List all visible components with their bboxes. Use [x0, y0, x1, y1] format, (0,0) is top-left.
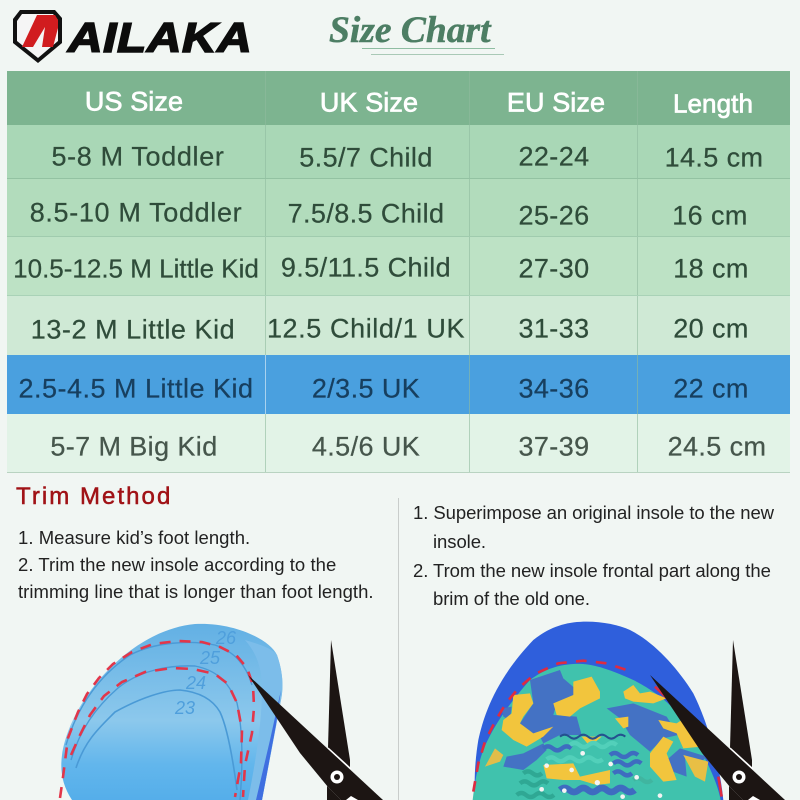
- row 1: [7, 125, 790, 179]
- size table: 20 cm: [673, 314, 749, 344]
- row 5 text: 2.5-4.5 M Little Kid: [18, 374, 254, 404]
- size table: 14.5 cm: [665, 142, 763, 172]
- size table: 2/3.5 UK: [312, 374, 420, 404]
- size table: Length: [673, 88, 753, 118]
- left instructions: 1. Measure kid’s foot length.: [18, 527, 250, 548]
- size table: 12.5 Child/1 UK: [267, 314, 465, 344]
- size table: 31-33: [518, 314, 590, 344]
- trim line: [473, 661, 632, 792]
- right instructions: insole.: [433, 531, 486, 552]
- logo: [13, 10, 252, 63]
- size table: 34-36: [518, 374, 590, 404]
- row 2 text: 8.5-10 M Toddler: [30, 198, 242, 228]
- trim lines: [60, 641, 254, 798]
- right instructions: [413, 502, 774, 609]
- left instructions: [18, 527, 374, 602]
- camo: yellow patches: [502, 693, 553, 747]
- moulded trim guides: [76, 690, 237, 790]
- size table: 37-39: [518, 432, 590, 462]
- row 6 text: 5-7 M Big Kid: [50, 432, 218, 462]
- left instructions: trimming line that is longer than foot length.: [18, 581, 374, 602]
- size table: UK Size: [320, 88, 418, 118]
- size table: EU Size: [507, 88, 605, 118]
- insole: blue foam: [60, 624, 282, 800]
- row 4: [7, 296, 790, 355]
- size numbers: 26: [215, 628, 237, 648]
- size numbers: [174, 628, 237, 718]
- trim method heading: Trim Method: [16, 483, 172, 510]
- header labels: US Size: [85, 86, 183, 116]
- size table: [7, 71, 790, 473]
- size table: 24.5 cm: [668, 432, 766, 462]
- row 1 text: 5-8 M Toddler: [51, 142, 225, 172]
- right instructions: brim of the old one.: [433, 588, 590, 609]
- size table: 5.5/7 Child: [299, 142, 433, 172]
- brand name: AILAKA: [68, 14, 252, 61]
- title underline: [362, 48, 504, 55]
- icon: left scissors: [248, 640, 383, 800]
- size table: 4.5/6 UK: [312, 432, 420, 462]
- tread pattern: [543, 763, 610, 785]
- column divider: [398, 498, 399, 800]
- size table: 18 cm: [673, 254, 749, 284]
- size table: 25-26: [518, 200, 590, 230]
- row 4 text: 13-2 M Little Kid: [31, 314, 235, 344]
- row 3: [7, 237, 790, 296]
- right instructions: 2. Trom the new insole frontal part along the: [413, 560, 771, 581]
- header row: [7, 71, 790, 125]
- row 5 highlighted: [7, 355, 790, 414]
- size table: 9.5/11.5 Child: [281, 252, 451, 282]
- size table: 16 cm: [672, 200, 748, 230]
- size table: 7.5/8.5 Child: [288, 198, 444, 228]
- row 2: [7, 179, 790, 237]
- row 6: [7, 414, 790, 473]
- size table: 22-24: [518, 142, 590, 172]
- right instructions: 1. Superimpose an original insole to the new: [413, 502, 774, 523]
- size numbers: 25: [199, 648, 221, 668]
- size table: 27-30: [518, 254, 590, 284]
- title: Size Chart: [329, 10, 491, 51]
- insole: camo: [473, 622, 723, 800]
- icon: shield: [13, 10, 62, 63]
- left instructions: 2. Trim the new insole according to the: [18, 554, 336, 575]
- size numbers: 23: [174, 698, 195, 718]
- size table: 22 cm: [673, 374, 749, 404]
- row 3 text: 10.5-12.5 M Little Kid: [13, 254, 259, 284]
- size numbers: 24: [185, 673, 206, 693]
- icon: right scissors: [650, 640, 785, 800]
- camo: blue patches: [503, 670, 582, 770]
